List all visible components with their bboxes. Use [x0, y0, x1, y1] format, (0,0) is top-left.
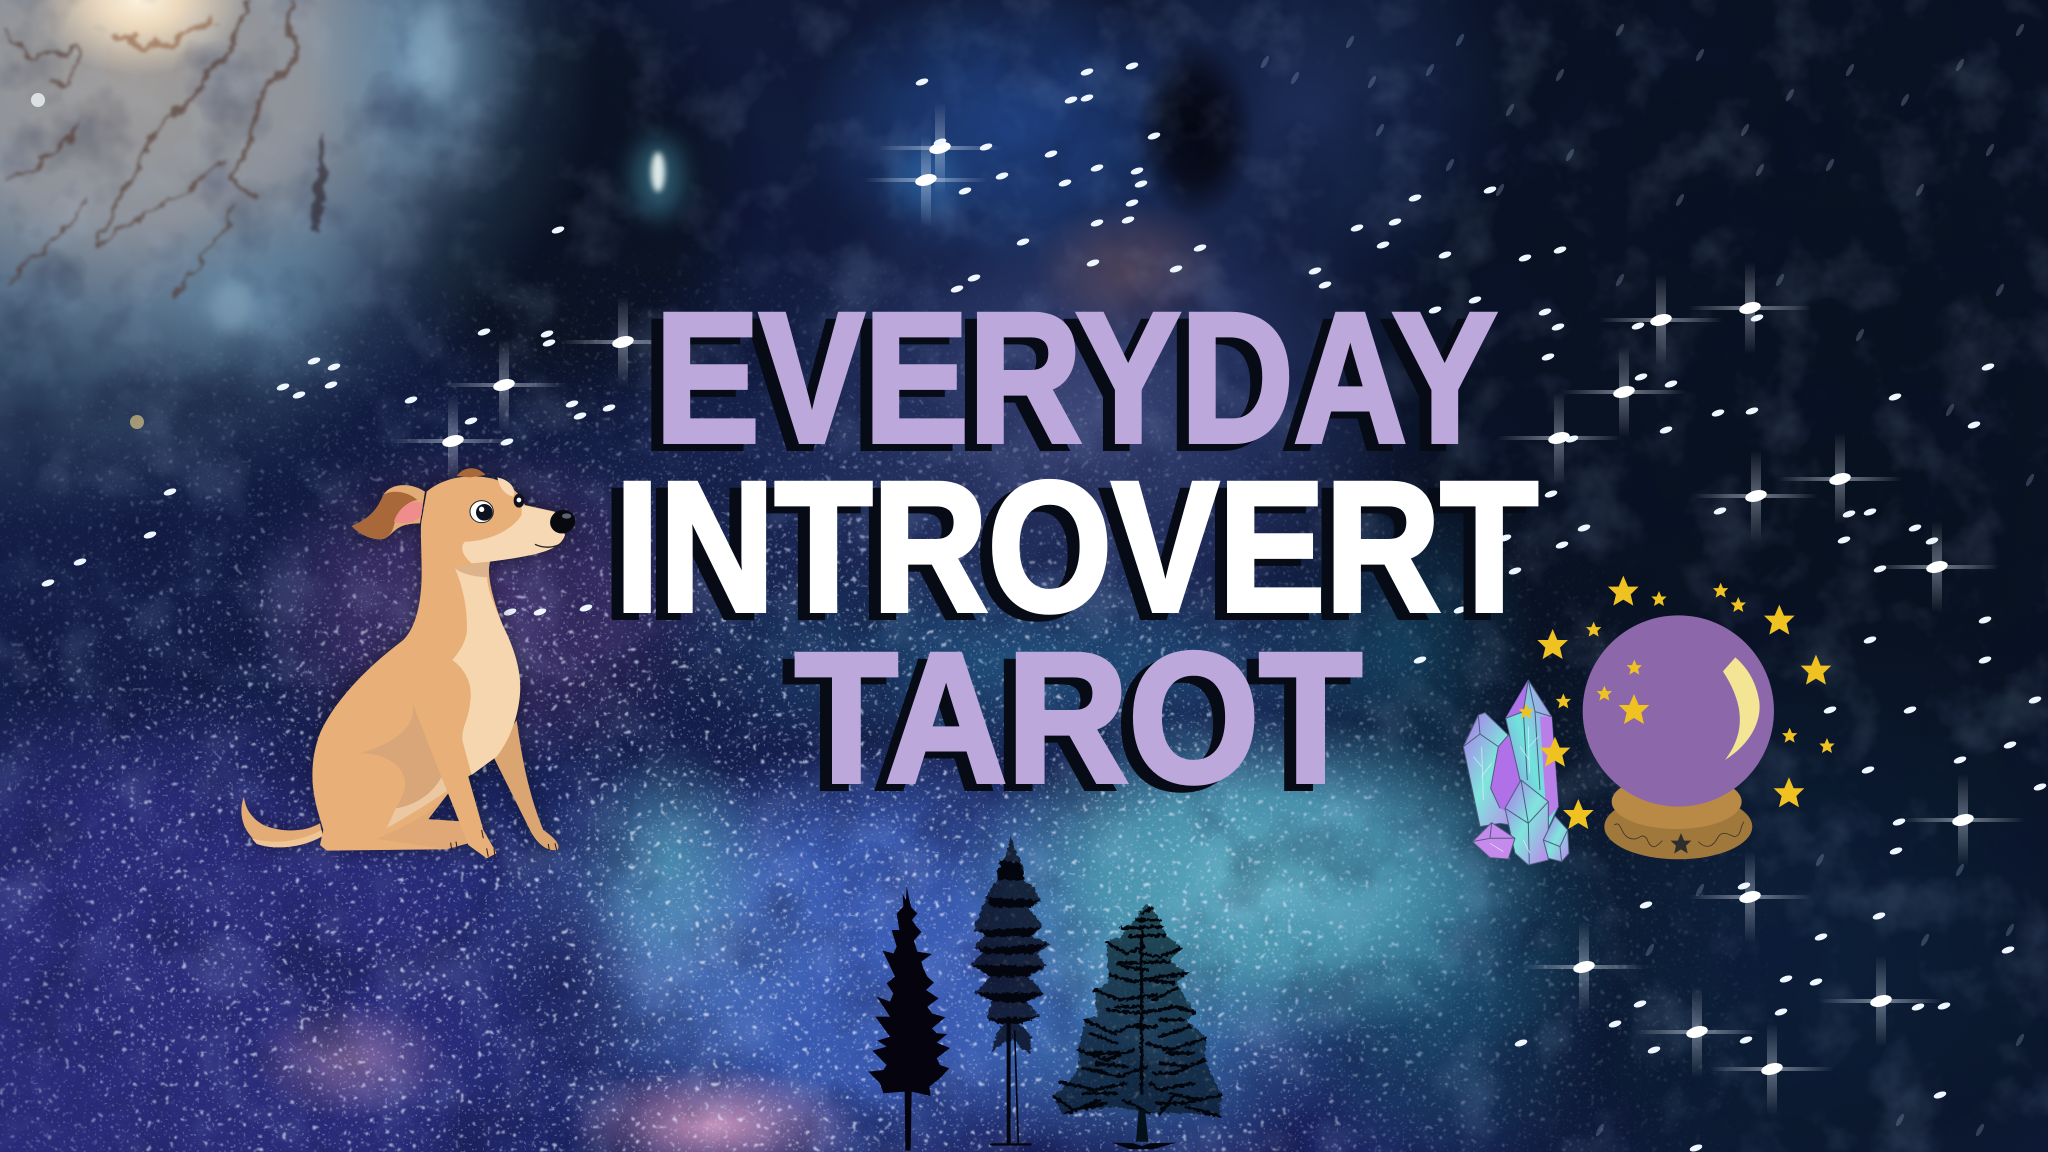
tree: tall layered pine	[971, 835, 1051, 1146]
glass sphere	[1583, 615, 1774, 807]
title line: EVERYDAY: EVERYDAY	[655, 276, 1497, 482]
tree: sketched spruce	[1053, 903, 1222, 1149]
ball base	[1604, 774, 1752, 859]
illustration: sitting dog	[241, 468, 579, 858]
title line: TAROT: TAROT	[795, 616, 1362, 822]
illustration: three pine trees	[868, 835, 1222, 1151]
nebula highlights	[31, 2, 960, 429]
crescent moon	[1723, 657, 1760, 760]
title	[615, 276, 1538, 822]
tree: solid silhouette	[868, 886, 950, 1151]
illustration: crystal cluster	[1463, 680, 1569, 865]
gold stars	[1519, 576, 1835, 829]
paws	[451, 830, 557, 857]
muzzle and face	[455, 477, 579, 577]
illustration: crystal ball	[1519, 576, 1835, 859]
round star specks	[0, 270, 1745, 1152]
fine star dust	[0, 295, 1696, 1152]
faint motion-blurred stars	[1259, 23, 2036, 1137]
ear	[352, 485, 425, 539]
galaxy dust lanes	[8, 4, 322, 300]
title line: INTROVERT: INTROVERT	[615, 444, 1538, 650]
